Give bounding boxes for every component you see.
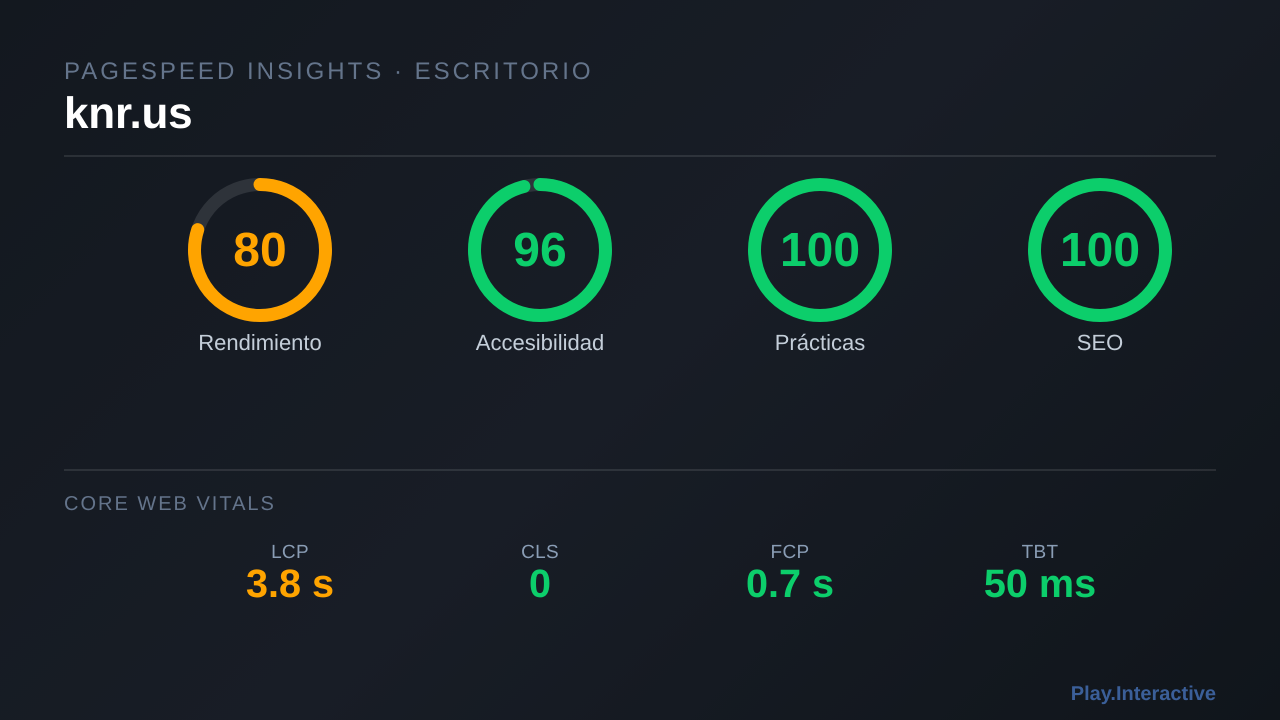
metric: LCP: LCP bbox=[271, 542, 309, 563]
score value: 80: 80 bbox=[233, 224, 287, 277]
label: SEO: SEO bbox=[1077, 330, 1123, 355]
score value: 100 SEO: 100 bbox=[1060, 224, 1140, 277]
metric: TBT: TBT bbox=[1022, 542, 1058, 563]
label: Rendimiento: Rendimiento bbox=[198, 330, 322, 355]
gauge: Accesibilidad 96 bbox=[474, 184, 606, 316]
metric: TBT bbox=[984, 542, 1096, 606]
metric: FCP: FCP bbox=[771, 542, 809, 563]
metric: LCP bbox=[246, 542, 334, 606]
label: Prácticas: Prácticas bbox=[775, 330, 865, 355]
gauge: SEO 100 bbox=[1034, 184, 1166, 316]
title: knr.us bbox=[64, 89, 192, 138]
score value: 96: 96 bbox=[513, 224, 567, 277]
metric: FCP: 0.7 s bbox=[746, 562, 834, 606]
gauge: Prácticas 100 bbox=[754, 184, 886, 316]
gauge: Rendimiento 80 bbox=[194, 184, 326, 316]
score value: 100 Prácticas: 100 bbox=[780, 224, 860, 277]
label: Accesibilidad: Accesibilidad bbox=[476, 330, 604, 355]
section heading: core web vitals: CORE WEB VITALS bbox=[64, 493, 276, 515]
score gauges bbox=[188, 178, 1172, 322]
metric: LCP: 3.8 s bbox=[246, 562, 334, 606]
metric: CLS: 0 bbox=[529, 562, 551, 606]
footer brand: Play.Interactive bbox=[1071, 683, 1216, 705]
metric: CLS: CLS bbox=[521, 542, 559, 563]
metric: TBT: 50 ms bbox=[984, 562, 1096, 606]
eyebrow heading: PAGESPEED INSIGHTS · ESCRITORIO bbox=[64, 58, 594, 85]
metric: FCP bbox=[746, 542, 834, 606]
metric: CLS bbox=[521, 542, 559, 606]
